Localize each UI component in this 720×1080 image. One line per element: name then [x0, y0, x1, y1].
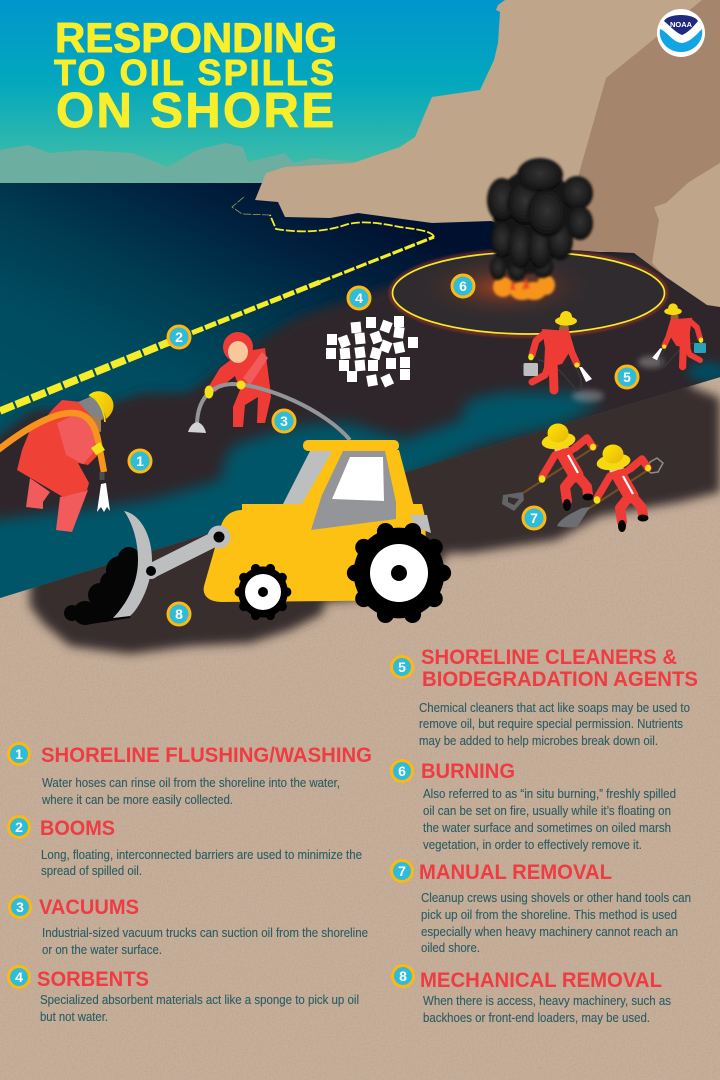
section 8: mechanical removal: backhoes or front-end loaders, may be used. — [423, 1010, 650, 1025]
scene number badges: 1 — [136, 453, 144, 469]
cab frame — [300, 450, 414, 507]
section 2: booms: spread of spilled oil. — [41, 863, 142, 878]
section 3: vacuums: Industrial-sized vacuum trucks can suction oil from the shoreline — [42, 925, 368, 940]
section 6: burning — [392, 759, 676, 852]
section 7: manual removal: pick up oil from the shoreline. This method is used — [421, 907, 677, 922]
title: ON SHORE — [56, 84, 334, 138]
dark cliff face — [569, 0, 720, 307]
scene number badges: 2 — [175, 329, 183, 345]
water — [0, 183, 720, 603]
rear panel — [410, 515, 431, 533]
section 3: vacuums — [10, 895, 368, 957]
section 8: mechanical removal: MECHANICAL REMOVAL — [420, 968, 662, 992]
section 5: shoreline cleaners: SHORELINE CLEANERS & — [421, 645, 677, 669]
sky — [0, 0, 720, 185]
title: RESPONDING — [55, 14, 337, 61]
scene number badges: 5 — [623, 369, 631, 385]
section 6: burning: the water surface and sometimes on oiled marsh — [423, 820, 671, 835]
section 8: mechanical removal: When there is access, heavy machinery, such as — [423, 993, 671, 1008]
oiled shoreline above waterline — [0, 250, 720, 610]
section 4: sorbents: 4 — [15, 969, 23, 985]
chemical spray mist — [572, 356, 664, 402]
cab window — [332, 457, 384, 501]
scene number badges: 4 — [355, 290, 363, 306]
worker spraying shoreline cleaner, near — [524, 311, 592, 391]
scene number badges: 3 — [280, 413, 288, 429]
section 5: shoreline cleaners: BIODEGRADATION AGENTS — [422, 667, 698, 691]
oil in bucket — [64, 547, 145, 625]
sorbent pads — [326, 316, 418, 388]
section 7: manual removal — [392, 860, 691, 955]
section 6: burning: vegetation, in order to effectively remove it. — [423, 837, 642, 852]
cab side panel — [283, 451, 333, 504]
section 1: shoreline flushing: Water hoses can rinse oil from the shoreline into the water, — [42, 775, 340, 790]
scene number badges: 8 — [175, 606, 183, 622]
section 2: booms: 2 — [15, 819, 23, 835]
worker spraying shoreline cleaner, far — [652, 303, 706, 367]
section 4: sorbents: Specialized absorbent materials act like a sponge to pick up oil — [40, 992, 359, 1007]
beach sand — [0, 370, 720, 1080]
section 1: shoreline flushing: where it can be more easily collected. — [41, 792, 233, 807]
title — [54, 14, 337, 138]
section 7: manual removal: MANUAL REMOVAL — [419, 860, 612, 884]
scene number badges: 6 — [459, 278, 467, 294]
section 2: booms — [8, 816, 362, 878]
section 8: mechanical removal — [392, 966, 671, 1025]
section 3: vacuums: or on the water surface. — [42, 942, 162, 957]
section 6: burning: 6 — [398, 763, 406, 779]
section 4: sorbents — [8, 966, 359, 1024]
burn ring — [390, 250, 666, 336]
loader arm — [151, 537, 219, 571]
section 3: vacuums: VACUUMS — [39, 895, 139, 919]
section 5: shoreline cleaners: Chemical cleaners that act like soaps may be used to — [419, 700, 690, 715]
arm pivot — [208, 526, 230, 548]
section 7: manual removal: especially when heavy machinery cannot reach an — [421, 924, 678, 939]
oiled shoreline below waterline — [30, 340, 720, 654]
section 5: shoreline cleaners: remove oil, but require special permission. Nutrients — [419, 716, 683, 731]
section 2: booms: BOOMS — [40, 816, 115, 840]
NOAA logo — [657, 9, 705, 57]
title: TO OIL SPILLS — [54, 52, 334, 93]
section 6: burning: BURNING — [421, 759, 515, 783]
section 5: shoreline cleaners: 5 — [398, 659, 406, 675]
loader body — [204, 504, 428, 602]
section 8: mechanical removal: 8 — [399, 968, 407, 984]
section 7: manual removal: Cleanup crews using shovels or other hand tools can — [421, 890, 691, 905]
section 7: manual removal: oiled shore. — [421, 940, 480, 955]
large wheel — [347, 523, 451, 623]
cab roof — [303, 440, 399, 451]
section 4: sorbents: but not water. — [40, 1009, 108, 1024]
section 1: shoreline flushing: 1 — [15, 746, 23, 762]
smoke plume — [487, 158, 593, 281]
boom line — [0, 196, 434, 411]
worker with hose: shoreline flushing — [0, 391, 113, 532]
section 6: burning: Also referred to as “in situ burning,” freshly spilled — [423, 786, 676, 801]
scene number badges: 7 — [530, 510, 538, 526]
NOAA logo: NOAA — [670, 20, 693, 29]
light cliff — [255, 0, 720, 252]
section 7: manual removal: 7 — [398, 863, 406, 879]
section 6: burning: oil can be set on fire, usually while it’s floating on — [423, 803, 671, 818]
shovel crew — [502, 424, 663, 532]
small wheel — [235, 564, 291, 620]
section 3: vacuums: 3 — [16, 899, 24, 915]
near cliff buttress — [652, 163, 720, 307]
section 1: shoreline flushing — [8, 743, 372, 807]
section 5: shoreline cleaners — [392, 645, 698, 748]
distant mountains — [0, 143, 360, 184]
section 5: shoreline cleaners: may be added to help microbes break down oil. — [419, 733, 658, 748]
scene number badges — [129, 275, 638, 625]
section 4: sorbents: SORBENTS — [37, 967, 149, 991]
section 1: shoreline flushing: SHORELINE FLUSHING/WASHING — [41, 743, 372, 767]
bucket — [113, 511, 152, 618]
flames — [493, 275, 555, 300]
front-end loader — [64, 440, 451, 625]
worker with vacuum hose — [188, 332, 350, 440]
cab window frame — [311, 451, 396, 530]
section 2: booms: Long, floating, interconnected barriers are used to minimize the — [41, 847, 362, 862]
